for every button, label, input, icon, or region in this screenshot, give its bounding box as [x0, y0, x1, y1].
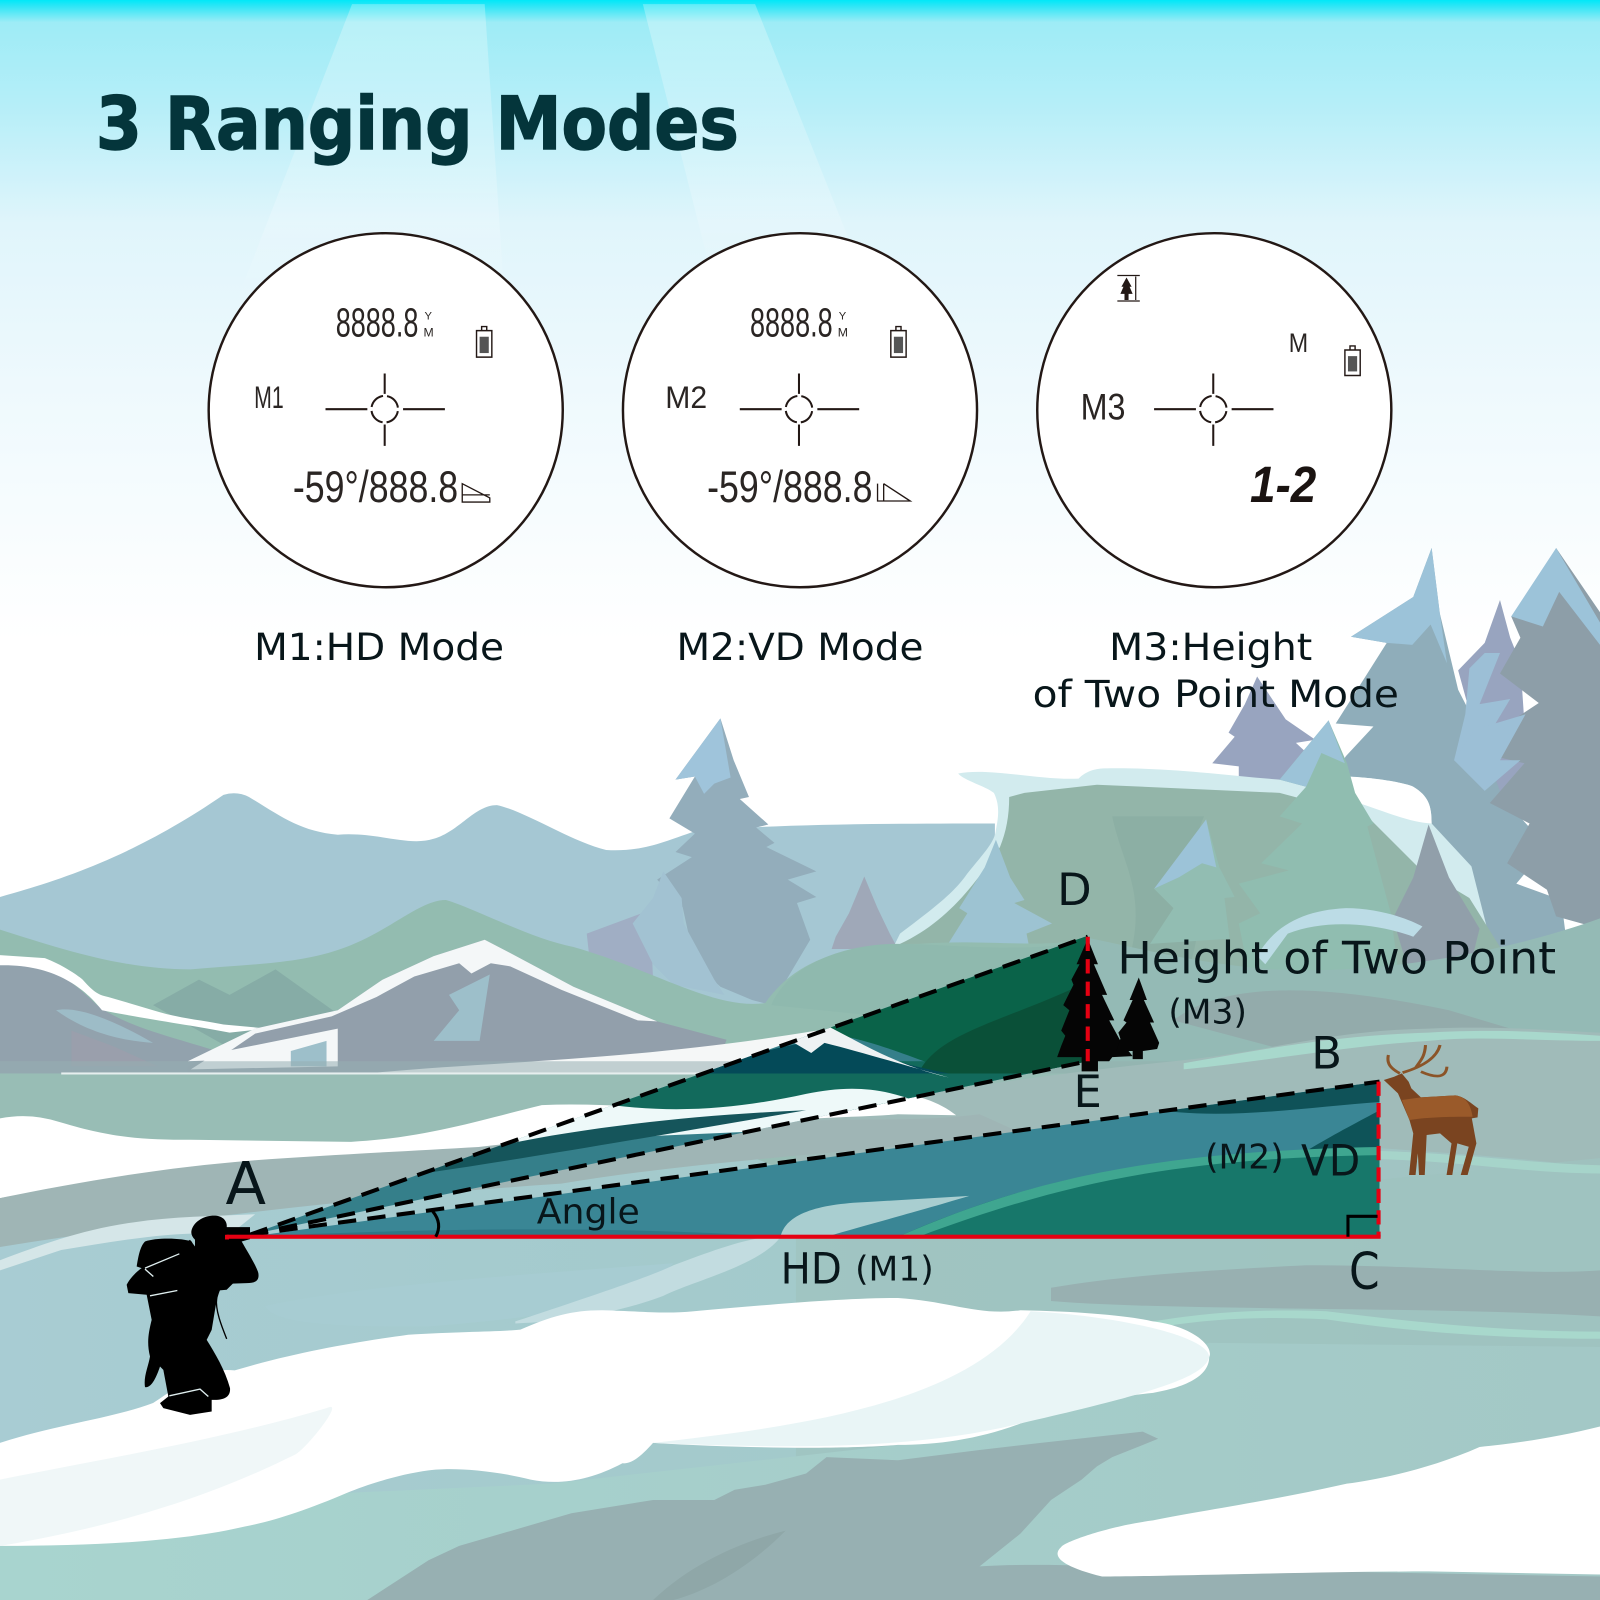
mode M1: M1 [254, 379, 284, 415]
HD triangle icon [462, 484, 490, 502]
snowy mountain centre [188, 940, 816, 1073]
sector: D-E colored triangle [245, 929, 1092, 1245]
mode M2: M2 [665, 379, 707, 415]
darker band left of sector [307, 1230, 736, 1234]
eye laser [225, 1235, 229, 1239]
small distant hills [153, 969, 347, 1051]
green highlight strip [898, 1147, 1380, 1237]
snowy mountain left [0, 955, 267, 1073]
snow hill band [1020, 918, 1600, 1061]
point labels: A [226, 1149, 266, 1218]
icon: hiker with binoculars [127, 1216, 259, 1415]
lens circle [623, 233, 977, 587]
big right trees [1316, 548, 1600, 980]
hanging cord [216, 1298, 227, 1339]
dark band at top of sector [1172, 1084, 1380, 1114]
dashed line A to D [250, 937, 1088, 1235]
label HD: HD [781, 1245, 842, 1295]
back mountains [0, 793, 995, 1071]
backpack straps [145, 1254, 208, 1396]
caption M1: M1:HD Mode [254, 625, 504, 669]
red dashed B to C [1377, 1082, 1381, 1237]
label M3: (M3) [1168, 992, 1247, 1031]
head and torso fill [140, 1220, 243, 1296]
icon: black pine trees [1057, 939, 1159, 1071]
navy mountain [710, 1043, 948, 1074]
dashed line A to B [250, 1082, 1380, 1235]
white snow bank in sector [492, 1088, 908, 1148]
rounded green hill [771, 941, 1224, 1031]
dark green hills [825, 936, 1088, 1074]
gray tree shadow foreground [367, 1432, 1600, 1600]
caption M3: of Two Point Mode [1033, 672, 1399, 716]
point labels [226, 863, 1380, 1302]
icon: deer [1384, 1045, 1478, 1175]
reticle M2: M [838, 326, 848, 340]
meltwater streak [515, 1237, 781, 1323]
angle and distance readout: -59°/888.8 [293, 461, 458, 512]
angle and distance readout: -59°/888.8 [707, 461, 872, 512]
crosshair [1154, 373, 1273, 446]
unit Y M: Y [839, 310, 847, 322]
tall middle tree [633, 718, 816, 1005]
title: 3 Ranging Modes [96, 82, 739, 167]
pale forest trees on cliff [945, 720, 1480, 980]
lens circle [1037, 233, 1391, 587]
reticle M3 [1037, 233, 1391, 587]
far right purple trees [587, 600, 1531, 980]
point labels: B [1311, 1026, 1342, 1079]
red dashed D to E [1086, 937, 1090, 1061]
dark band in sector [408, 1110, 806, 1176]
measurement step: 1-2 [1250, 456, 1316, 513]
main ground [0, 1139, 1600, 1600]
gray ground shadow [1051, 1265, 1600, 1316]
white lake snow [0, 1089, 956, 1198]
lake shore [0, 1061, 1600, 1077]
bottom right snow bank [1058, 1427, 1600, 1577]
green lower sector [898, 1149, 1380, 1237]
caption M3: M3:Height [1109, 625, 1312, 669]
label Height of Two Point: Height of Two Point [1117, 931, 1556, 984]
angle arc [433, 1211, 439, 1237]
reticle M1: M [423, 326, 434, 340]
light beams [235, 4, 867, 306]
dark green patches [922, 990, 1082, 1074]
frozen lake [0, 1073, 1600, 1186]
sector: angle A-B-C colored triangle [264, 1084, 1380, 1235]
far right ground [796, 1028, 1600, 1600]
label M1: (M1) [855, 1250, 934, 1289]
battery icon [891, 327, 906, 357]
label Angle: Angle [537, 1192, 640, 1232]
crosshair [326, 373, 445, 446]
lens circle [209, 233, 563, 587]
light snow gap in sector [781, 1196, 969, 1237]
mode M3: M3 [1081, 386, 1126, 427]
dashed line A to E [250, 1061, 1088, 1235]
lake section [612, 1061, 1092, 1112]
battery icon [1345, 346, 1360, 376]
label VD: VD [1301, 1137, 1360, 1187]
light strip right of snow [1153, 1311, 1600, 1339]
antlers [1388, 1045, 1447, 1076]
left snow streak [0, 1214, 255, 1270]
light ridge strip under deer [918, 1151, 1600, 1237]
unit M: M [1289, 328, 1308, 358]
point labels: D [1057, 863, 1092, 916]
reticle M2 [623, 233, 977, 587]
large lower snow bank [0, 1298, 1210, 1546]
VD triangle icon [878, 484, 910, 501]
snow on navy mountain [791, 1026, 949, 1078]
gray snow band [0, 1114, 1020, 1247]
tree height icon [1117, 276, 1140, 301]
range readout: 8888.8 [750, 300, 833, 346]
lake reflection line [61, 1072, 857, 1074]
unit Y M: Y [424, 310, 432, 322]
teal ground lower [0, 1343, 1600, 1600]
dark wedge near VD [1309, 1112, 1380, 1150]
crosshair [740, 373, 859, 446]
range readout: 8888.8 [336, 300, 418, 346]
green ridge [0, 900, 1600, 1092]
point labels: C [1349, 1243, 1380, 1302]
right angle mark [1348, 1216, 1378, 1237]
reticle M1 [209, 233, 563, 587]
point labels: E [1073, 1065, 1102, 1118]
caption M2: M2:VD Mode [677, 625, 923, 669]
battery icon [477, 327, 492, 357]
red line HD [227, 1235, 1381, 1239]
caption M3 [1033, 625, 1399, 716]
cliff plateau [878, 768, 1520, 1031]
label M2: (M2) [1205, 1137, 1284, 1176]
light ridge strip [1184, 1031, 1600, 1069]
